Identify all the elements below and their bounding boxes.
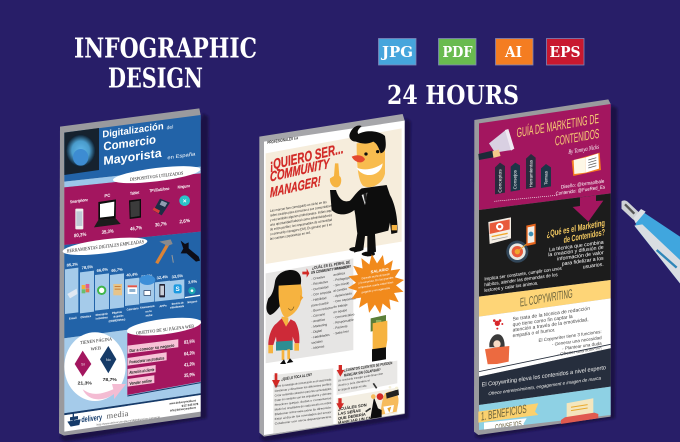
- arrow: [83, 384, 126, 399]
- text block: copywriter functions: [538, 329, 602, 357]
- heading: what is content marketing: de Contenidos?: [564, 227, 605, 245]
- icon: card terminal: [153, 199, 170, 215]
- heading: quiero ser: [270, 141, 343, 201]
- footer: delivery media: [67, 398, 199, 427]
- panel: profile list: - Analítico: [311, 317, 325, 324]
- chart: devices used: 35,3%: [102, 228, 114, 236]
- panel: how many clients: [337, 360, 397, 395]
- text block: definition: usuarios.: [583, 262, 604, 271]
- chart: content pillars: [495, 154, 551, 194]
- panel: profile list: - Resolutivo: [311, 280, 328, 286]
- badge: EPS: EPS: [550, 43, 580, 61]
- panel: profile list: para escribir: [311, 301, 329, 308]
- heading: quiero ser: COMMUNITY: [270, 156, 330, 186]
- panel: has website: [64, 332, 126, 401]
- panel: what does a cm do: Gestionar y dinamizar los diferentes perfiles: [275, 382, 332, 393]
- panel: profile list: - Paciente: [333, 324, 348, 330]
- panel: profile list: - Sabe leer: [333, 329, 349, 336]
- panel: main tools: ¿CUÁLES SON: [338, 402, 367, 412]
- panel: main tools: LAS SEÑAS: [338, 408, 361, 416]
- callout: salary star: y la empresa. En las grandes: [358, 275, 394, 285]
- panel: main tools: [336, 383, 399, 425]
- text block: habits: hábitos, atender las demandas de los: [484, 272, 558, 288]
- heading: guide title: [517, 111, 599, 149]
- panel: profile list: - Marketing: [311, 322, 327, 329]
- icon: cloud: [139, 275, 155, 295]
- text block: copywriter functions: El Copywriter tiene 3 funciones:: [538, 329, 602, 343]
- label: author: By Tannya Nicks: [568, 144, 599, 156]
- panel: how many clients: ¿CUÁNTOS CLIENTES SE PUEDEN: [344, 360, 392, 373]
- panel: profile list: al cambio: [333, 287, 347, 293]
- arrow: down: [573, 195, 603, 222]
- chart: digital tools bars: Email: [69, 316, 77, 321]
- chart: digital tools bars: 32,4%: [157, 274, 168, 280]
- panel: website objective: Atención al cliente: [129, 367, 155, 375]
- text block: intro: o community managers (CM). Es genuino por ti en: [270, 223, 332, 236]
- callout: salary star: empresas suele estar bien: [358, 280, 394, 290]
- divider stripes: [479, 344, 611, 375]
- panel: book 1 digital wholesale commerce: [59, 108, 208, 442]
- chart: devices used: [70, 183, 190, 239]
- text block: copywriting benefit: El Copywriting eleva los contenidos a nivel experto: [482, 365, 607, 389]
- panel: profile list: - Con empatía: [311, 290, 332, 297]
- icon: wrench: [181, 241, 200, 262]
- text block: copywriting definition: atención a través de la emotividad,: [513, 317, 589, 334]
- chart: digital tools bars: 85,2%: [67, 261, 78, 268]
- panel: has website: WEB: [91, 346, 101, 353]
- text block: definition: para fidelizar a los: [562, 256, 604, 268]
- footer: delivery media: http://www.deliverymedia.es/digitalizacion-comercio: [97, 415, 161, 427]
- text block: intro: una oportunidad laboral como administradores: [270, 213, 332, 227]
- icon: smartphone: [75, 209, 83, 229]
- icon: laptop: [94, 199, 121, 227]
- heading: what is content marketing: [547, 218, 605, 245]
- icon: tablet: [129, 199, 141, 219]
- panel: profile list: - Manejo de: [333, 264, 350, 271]
- panel: has website: 21,3%: [78, 381, 92, 387]
- chart: content pillars: Herramientas: [528, 160, 534, 187]
- footer: delivery media: info@deliverymedia.es: [170, 405, 196, 413]
- icon: diamond no: No: [106, 358, 111, 362]
- panel: what does a cm do: Definir la estrategia de comunicación en el social media: [275, 377, 332, 388]
- icon: target: [506, 241, 528, 263]
- text block: intro: [270, 200, 332, 241]
- arrow: [337, 365, 344, 377]
- text block: definition: [548, 240, 604, 271]
- panel: what does a cm do: Estar al día de las novedades del sector: [275, 410, 331, 421]
- heading: report title: Comercio: [103, 132, 156, 154]
- panel: profile list: en equipo: [333, 308, 347, 314]
- panel: profile list: sociales: [311, 339, 323, 345]
- chart: digital tools bars: Servicio de: [172, 300, 184, 306]
- chart: devices used: TPV/Datáfono: [149, 186, 170, 193]
- panel: profile list: - Con capacidad: [333, 296, 357, 304]
- text block: credits: Diseño: @lormaolbale: [561, 179, 605, 191]
- heading: quiero ser: ¡QUIERO SER...: [270, 141, 343, 174]
- chart: devices used: PC: [104, 193, 110, 198]
- banner: second ribbon: CONSEJOS: [495, 419, 522, 432]
- panel: website objective: 35,9%: [184, 372, 195, 379]
- chart: content pillars: Consejos: [513, 170, 519, 189]
- panel: website objective: OBJETIVO DE SU PÁGINA WEB: [136, 324, 194, 337]
- format badges: [378, 38, 584, 65]
- chart: digital tools bars: Calendario: [127, 306, 139, 312]
- badge: PDF: [438, 38, 476, 65]
- panel: what does a cm do: [272, 368, 333, 435]
- panel: how many clients: la carga de trabajo es alta: [338, 383, 367, 392]
- arrow: [272, 373, 280, 388]
- chart: content pillars: Temas: [544, 171, 550, 185]
- chart: digital tools bars: [65, 261, 200, 323]
- text block: intro: de estos perfiles: los responsables de comunidad: [270, 218, 332, 232]
- chart: digital tools bars: 35,5%: [141, 273, 153, 279]
- badge: AI: AI: [504, 43, 522, 61]
- chart: digital tools bars: 33,5%: [172, 273, 183, 279]
- chart: devices used: 80,3%: [74, 232, 87, 239]
- panel: profile list: ¿CUÁL ES EL PERFIL DE: [312, 259, 351, 270]
- heading: report title: [102, 121, 196, 168]
- icon: pen: [624, 204, 680, 283]
- badge: JPG: [378, 38, 416, 65]
- background: cream header panel: [266, 128, 402, 264]
- title: [74, 34, 257, 94]
- heading: digital tools banner: [62, 234, 148, 258]
- panel: profile list: - Cercano: [311, 312, 325, 318]
- image: network head: [64, 128, 99, 175]
- chart: digital tools bars: en la: [145, 309, 152, 314]
- chart: digital tools bars: nube: [146, 313, 153, 318]
- footer: delivery media: www.deliverymedia.es: [168, 398, 196, 406]
- panel: profile list: - Comunicativo: [333, 312, 355, 320]
- callout: salary star: pagado y en agencias: [362, 286, 391, 294]
- panel: main tools: QUE DEBERÍA: [338, 412, 366, 421]
- arrow: [302, 268, 309, 278]
- heading: report title: Mayorista: [103, 146, 162, 168]
- panel: main tools: MANEJAR UN CM?: [338, 414, 375, 425]
- chart: digital tools bars: 78,5%: [82, 264, 93, 270]
- illustration: hand with money: [371, 315, 387, 362]
- text block: definition: la creación y difusión de: [548, 245, 604, 258]
- text block: intro: las cuentas corporativas en red.: [270, 231, 311, 241]
- icon: document on base: [561, 398, 598, 424]
- text block: definition: La técnica que combina: [549, 240, 604, 253]
- heading: guide title: GUÍA DE MARKETING DE: [517, 111, 599, 140]
- panel: what does a cm do: Resolver quejas, dudas o comentarios: [275, 396, 332, 407]
- panel: profile list: [266, 258, 357, 363]
- panel: what does a cm do: Medir los resultados de cada acción en redes: [275, 401, 332, 412]
- heading: report title: en España: [167, 151, 196, 161]
- panel: website objective: 64,3%: [184, 350, 195, 358]
- icon: ship logo: [67, 413, 81, 427]
- text block: copywriting definition: que tiene como fin captar la: [513, 314, 573, 328]
- icon: none: ×: [183, 198, 187, 205]
- badge: EPS: [546, 38, 584, 65]
- panel: book 3 content marketing: [474, 99, 617, 438]
- icon: phone: [526, 224, 536, 246]
- footer: delivery media: delivery: [81, 413, 102, 424]
- panel: has website: 78,7%: [103, 377, 117, 383]
- icon: email: [67, 289, 77, 298]
- chart: digital tools bars: Páginas: [112, 310, 122, 315]
- chart: devices used: Ninguno: [178, 183, 190, 190]
- panel: book 3 content marketing: EL COPYWRITING: [520, 286, 573, 310]
- icon: apps phone: [159, 284, 165, 297]
- panel: profile list: - Responsable: [333, 318, 354, 325]
- callout: salary star: SALARIO: [371, 266, 389, 274]
- chart: digital tools bars: Almacenamiento: [140, 304, 155, 310]
- badge: JPG: JPG: [380, 43, 413, 61]
- heading: report title: del: [167, 124, 173, 131]
- title: DESIGN: [108, 64, 203, 94]
- chart: content pillars: Conceptos: [498, 169, 504, 193]
- chart: devices used: Tablet: [130, 190, 140, 196]
- text block: copywriting definition: [513, 306, 590, 339]
- panel: what does a cm do: ¿QUÉ LE TOCA AL CM?: [281, 372, 312, 382]
- chart: digital tools bars: Ofimática: [80, 314, 91, 319]
- panel: how many clients: cuatro y seis clientes si: [338, 378, 370, 387]
- heading: devices banner: DISPOSITIVOS UTILIZADOS: [130, 171, 184, 183]
- panel: profile list: - Sin miedo: [333, 281, 350, 288]
- text block: habits: lectores y calar los ánimos.: [484, 280, 538, 294]
- icon: open book: [572, 153, 601, 176]
- text block: copywriter functions: - Plantear una duda: [562, 341, 602, 351]
- panel: what does a cm do: Elaborar informes para la dirección: [275, 405, 332, 416]
- icon: calendar: [128, 285, 137, 294]
- panel: website objective: 41,3%: [184, 361, 195, 369]
- banner: second ribbon: [484, 418, 527, 430]
- panel: website objective: Dar a conocer su negocio: [129, 343, 175, 353]
- heading: report title: Digitalización: [102, 121, 164, 141]
- chart: digital tools bars: 66,7%: [111, 267, 123, 273]
- panel: profile list: - Curiosidad: [311, 285, 329, 292]
- heading: quiero ser: MANAGER!: [270, 174, 321, 201]
- label: section name: PROFESIONALES s.a: [267, 135, 298, 145]
- icon: office apps: [82, 284, 89, 293]
- badge: AI: [496, 38, 533, 65]
- heading: devices banner: [112, 163, 201, 187]
- footer: delivery media: 912 345 678: [182, 402, 199, 408]
- text block: intro: y eso también algunos profesionales. Indian aquí: [270, 209, 332, 222]
- text block: definition: información de valor: [557, 250, 604, 263]
- chart: digital tools bars: 40,4%: [126, 271, 138, 278]
- panel: website objective: Promocionar sus productos: [129, 355, 165, 365]
- illustration: woman: [266, 270, 303, 364]
- chart: devices used: 46,7%: [130, 225, 142, 233]
- chart: digital tools bars: Mensajería: [96, 311, 108, 317]
- panel: how many clients: MANEJAR SIN COLAPSAR?: [344, 368, 381, 378]
- chart: digital tools bars: 66,6%: [97, 267, 108, 273]
- image: report card: [488, 217, 511, 244]
- panel: what does a cm do: Colaborar con otros departamentos: [275, 415, 332, 426]
- chart: digital tools bars: APPs: [159, 303, 167, 308]
- text block: intro: Las marcas han conseguido un nicho en las: [270, 200, 327, 213]
- panel: profile list: de trabajo: [333, 303, 348, 309]
- chart: devices used: 30,7%: [155, 221, 167, 229]
- panel: what does a cm do: Estar en contacto con los seguidores y clientes: [275, 391, 332, 402]
- panel: profile list: - Habilidad: [311, 296, 327, 302]
- panel: website objective: [126, 314, 202, 396]
- text block: copywriting definition: Se trata de la técnica de redacción: [513, 306, 590, 323]
- title: INFOGRAPHIC: [74, 34, 257, 64]
- panel: website objective: 83,5%: [184, 339, 195, 346]
- chart: digital tools bars: videollamada: [170, 304, 184, 310]
- chart: digital tools bars: (CRM/ERP/etc): [109, 317, 125, 323]
- chart: devices used: Smartphone: [70, 197, 88, 204]
- callout: salary star: [344, 250, 408, 318]
- illustration: cheering man: [366, 383, 399, 421]
- chart: digital tools bars: 3,5%: [188, 278, 198, 285]
- panel: profile list: UN COMMUNITY MANAGER?: [311, 264, 351, 275]
- text block: copywriter functions: - Ofrecer una solución: [557, 346, 602, 357]
- delivery time heading: 24 HOURS: [387, 81, 519, 111]
- text block: credits: Contenido: @FueRed_Es: [556, 184, 605, 197]
- icon: diamond yes: Sí: [81, 362, 85, 366]
- text block: habits: Implica ser constante, cumplir con unos: [484, 266, 562, 283]
- icon: video call: S: [176, 286, 180, 293]
- illustration: businessman: [330, 126, 397, 257]
- text block: intro: redes sociales para acercarse a sus consumidores: [270, 204, 332, 218]
- badge: PDF: PDF: [442, 43, 473, 61]
- icon: megaphone: [478, 129, 514, 160]
- panel: profile list: analítica: [333, 271, 345, 277]
- panel: how many clients: Un community manager puede llevar entre: [338, 371, 383, 383]
- chart: digital tools bars: instantánea: [96, 315, 108, 321]
- banner: benefits ribbon: 1. BENEFICIOS: [481, 402, 527, 424]
- panel: profile list: - Idiomas: [311, 344, 325, 350]
- panel: profile list: - Pedagogo: [333, 276, 350, 282]
- panel: book 3 content marketing: CONTENIDOS: [555, 126, 599, 149]
- icon: no tool: [188, 287, 196, 294]
- chart: devices used: 2,6%: [179, 218, 190, 225]
- text block: copywriting benefit: Ofrece entretenimiento, engagement e imagen de marca: [488, 375, 601, 396]
- panel: profile list: - Digital: [311, 329, 322, 334]
- text block: copywriter functions: - Generar una necesidad: [552, 335, 602, 347]
- panel: website objective: Vender online: [129, 378, 152, 386]
- chart: digital tools bars: de gestión: [113, 313, 124, 319]
- text block: copywriting definition: empatía o el humor.: [513, 327, 555, 339]
- chart: digital tools bars: Ninguno: [187, 299, 198, 304]
- icon: management pages: [113, 284, 122, 295]
- panel: profile list: - Buen redactor: [311, 306, 333, 313]
- banner: benefits ribbon: [478, 402, 538, 424]
- footer: delivery media: media: [107, 409, 129, 421]
- icon: reader with hearts: [485, 319, 509, 364]
- panel: has website: TIENEN PÁGINA: [80, 336, 113, 346]
- heading: what is content marketing: ¿Qué es el Marketing: [547, 218, 605, 239]
- text block: habits: [484, 266, 562, 294]
- text block: credits: [556, 179, 605, 197]
- panel: profile list: - Creativo: [311, 275, 325, 281]
- panel: profile list: - Apasionado: [333, 291, 352, 298]
- icon: hammer: [157, 239, 173, 263]
- panel: book 2 community manager: [259, 114, 411, 442]
- panel: what does a cm do: Crear contenido atractivo para las comunidades: [275, 387, 332, 398]
- panel: profile list: - Habilidades: [311, 333, 330, 340]
- arrow: [336, 398, 344, 410]
- callout: salary star: Depende mucho del puesto: [362, 272, 390, 280]
- heading: digital tools banner: HERRAMIENTAS DIGITALES EMPLEADAS: [67, 240, 144, 255]
- icon: messaging: [97, 286, 106, 295]
